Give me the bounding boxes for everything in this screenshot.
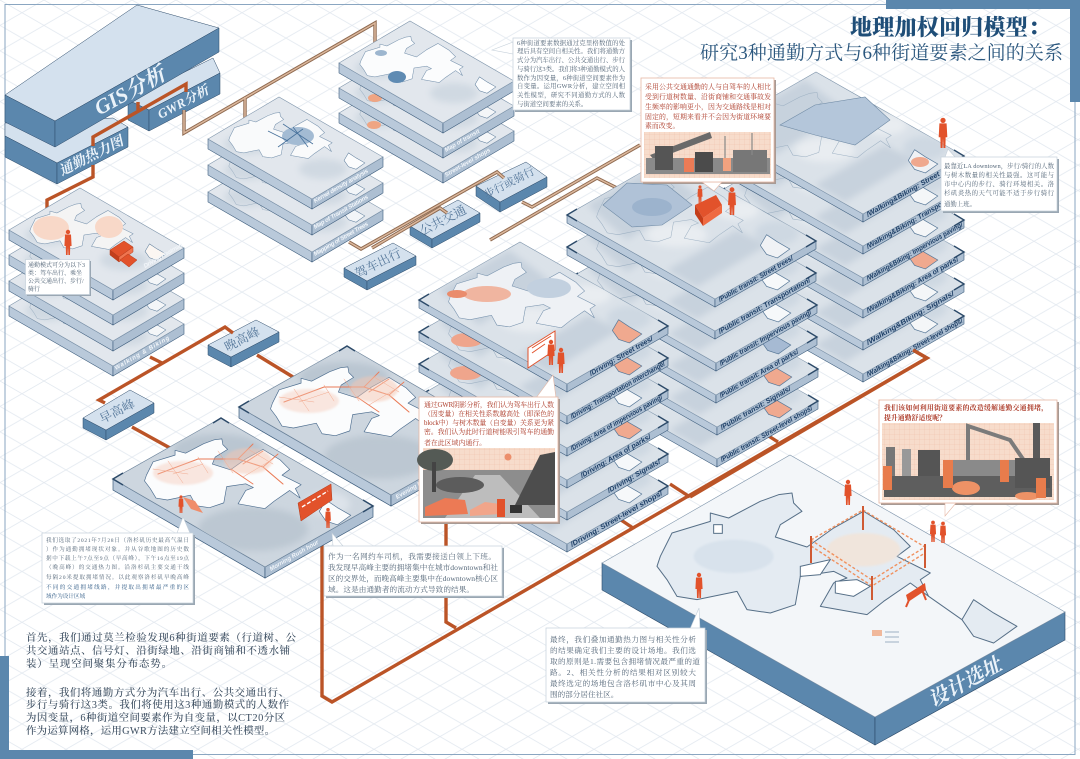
callout: walking note: 杉矶炎热的天气可能不适于步行骑行 [944,188,1055,197]
plate: D2: /Driving: Transportation interchange/ [569,360,667,421]
plate: T3: /Public transit: Impervious paving/ [718,309,814,368]
block: GWR analysis [128,58,220,131]
icon: red bus [298,484,332,528]
block: evening peak [208,320,279,367]
callout: site selection note: 取的原则是1.需要包含拥堵情况最严重的道 [550,656,700,666]
text block: method explanation: 首先，我们通过莫兰检验发现6种街道要素（行道树、公 [26,631,297,644]
text block: method explanation: 共交通站点、信号灯、沿街绿地、沿街商铺和不透水铺 [26,644,290,657]
plate: D3: /Driving: Area of impervious paving/ [569,394,665,453]
plate: T1 [567,157,816,307]
panel: morning rush hour map: Morning Rush hour [269,540,320,573]
plate: D2 [419,274,668,424]
text block: method explanation: 步行与骑行这3类。我们将使用这3种通勤模式的人数作 [26,698,290,711]
callout: driving note: 通过GWR阴影分析，我们认为驾车出行人数 [424,400,554,410]
callout: walking note: 与树木数量的相关性最强。这可能与 [944,170,1054,179]
icon: billboard with presenters [528,331,565,373]
title: 地理加权回归模型： [850,15,1050,40]
callout: driving note: block中）与树木数量（自变量）关系更为紧 [424,418,554,427]
plate: T2 [567,189,816,339]
plate: T1: /Public transit: Street trees/ [717,255,795,304]
text block: method explanation: 接着，我们将通勤方式分为汽车出行、公共交通出行、 [26,686,289,699]
callout: public transit note: 固定的，短期来看并不会因为街道环境要 [645,112,771,122]
plate: W4 [715,168,964,318]
plate: A1: Kernel density analysis [313,168,370,205]
text block: method explanation [26,631,297,737]
plate: A3: Mapping of Street Trees [313,221,370,258]
plate: T5 [569,285,818,435]
plate: T6 [569,317,818,467]
plate: D4 [419,338,668,488]
block: GWR analysis: GWR分析 [155,81,213,122]
callout: public transit note: 素而改变。 [645,121,679,130]
callout: driving note: （因变量）在相关性系数越高处（即深色的 [424,409,554,418]
plate: H4 [9,264,184,376]
map legend [872,630,899,642]
plate: T4 [568,253,817,403]
panel: walking and biking stack [715,72,965,382]
block: evening peak: 晚高峰 [222,324,263,354]
illustration: elevated rail collage [644,132,771,178]
callout: morning and evening data note: 不同的交通拥堵线路，并提取出拥堵最严重的区 [46,583,189,591]
block: public transit [410,200,480,248]
plate: W6 [715,232,965,382]
callout: morning and evening data note: ）作为通勤拥堵现状对象。并从谷歌地图的历史数 [46,545,189,553]
panel: heat map stack [9,188,184,376]
illustration: palm tree street collage [417,448,555,518]
panel: evening rush hour map [239,346,499,506]
block: driving [344,243,416,290]
title [700,15,1063,64]
plate: T2: /Public transit: Transportation/ [717,277,813,336]
block: commuting heat map: 通勤热力图 [56,133,128,179]
plate: A2: Map of Transit Stations [313,194,370,231]
plate: W5: /Walking&Biking: Signals/ [864,290,957,347]
plate: W2: /Walking&Biking: Transportation/ [865,189,965,251]
plate: B2 [339,46,514,158]
plate: W4: /Walking&Biking: Area of parks/ [865,256,961,315]
callout: site selection note [546,608,707,704]
block: commuting heat map [5,118,128,184]
callout: commuting modes: 类：驾车出行、乘坐 [28,269,82,277]
callout: site selection note: 路。2、相关性分析的结果相对区别较大 [550,667,696,677]
plate: H2 [9,213,184,325]
callout: morning and evening data note [42,517,195,605]
callout: public transit note [641,78,776,191]
callout: ride-hailing driver note: 作为一名网约车司机，我需要接送白领上下班。 [328,551,496,562]
callout: GWR method: 6种街道要素数据通过克里格数值的处 [517,38,626,47]
connector pipes: orange [47,84,927,702]
callout: ride-hailing driver note [324,533,504,598]
block: GIS analysis: GIS分析 [90,60,172,120]
callout: GWR method: 与骑行这3类。我们将3种通勤模式的人 [517,64,626,73]
callout: site selection note: 最终，我们叠加通勤热力图与相关性分析 [550,634,696,645]
callout: site selection note: 最终选定的场地包含洛杉矶市中心及其周 [550,678,696,688]
plate: H1 [9,188,184,300]
callout: ride-hailing driver note: 我发现早高峰主要的拥堵集中在城市downtown和社 [328,562,498,572]
subtitle: 研究3种通勤方式与6种街道要素之间的关系 [700,42,1063,64]
callout: GWR method: 自变量。运用GWR分析，建立空间相 [517,81,626,90]
plate: T5: /Public transit: Signals/ [719,385,793,432]
panel: evening rush hour map: Evening Rush hour [395,468,446,501]
plate: W1 [715,72,964,222]
callout: walking note: 市中心内的步行、骑行环境相关。洛 [944,179,1055,188]
block: GIS analysis [5,5,219,147]
connector pipes: tan [184,23,640,249]
panel: street element maps stack B [339,21,514,183]
block: public transit: 公共交通 [417,202,469,238]
plate: D1: /Driving: Street trees/ [588,335,655,378]
callout: driving note: 者在此区域内通行。 [424,438,486,447]
callout: morning and evening data note: 每隔20米提取拥堵情况。以此观察洛杉矶早晚高峰 [46,573,189,581]
panel: driving stack [419,242,668,552]
callout: site selection note: 围的部分居住社区。 [550,689,618,699]
callout: driving note [417,375,560,524]
callout: site selection note: 的结果确定我们主要的设计场地。我们选 [550,645,696,655]
orange pipe: upper run to walking stack [690,350,927,497]
callout: construction question [879,400,1059,516]
callout: commuting modes: 公共交通出行、步行/ [28,277,84,285]
map: city outline [657,493,1017,643]
illustration: construction site collage [882,423,1054,500]
plate: A2 [208,123,383,235]
plate: W6: /Walking&Biking: Street-level shops/ [865,317,965,379]
callout: commuting modes [26,260,91,296]
panel: morning rush hour map [113,418,373,578]
plate: B3 [339,71,514,183]
plate: T4: /Public transit: Area of parks/ [718,348,801,400]
callout: public transit note: 受到行道树数量、沿街商铺和交通事故发 [645,92,771,101]
plate: H1: Driving Heatmap [143,242,184,270]
text block: method explanation: 为因变量，6种街道空间要素作为自变量，以CT20分区 [26,711,285,724]
panel: street element maps stack A [208,97,383,262]
icon: figure with raised arm [939,118,947,148]
plate: A3 [208,150,383,262]
plate: D6 [419,402,668,552]
site selection label: 设计选址 [925,653,1007,712]
plate: D5: /Driving: Signals/ [606,458,663,495]
callout: morning and evening data note: 我们选取了2021年7月28日（洛杉矶历史最高气温日 [46,536,189,544]
plate: D5 [419,370,668,520]
plate: D4: /Driving: Area of parks/ [579,433,653,480]
callout: morning and evening data note: 域作为设计区域 [46,592,86,600]
callout: construction question: 提升通勤舒适度呢？ [884,413,946,422]
block: morning peak [83,390,154,440]
callout: morning and evening data note: （晚高峰）的交通热力图。沿洛杉矶主要交通干线 [46,563,189,571]
plate: W3 [715,136,965,286]
plate: D3 [419,306,668,456]
panel: public transit stack [567,157,818,467]
callout: public transit note: 生频率的影响更小，因为交通路线是相对 [645,102,771,112]
callout: ride-hailing driver note: 区的交界处，而晚高峰主要集中在downtown核心区 [328,573,498,584]
panel: site selection plate [602,455,1065,745]
plate: B3: Street-level shops [444,147,492,179]
text block: method explanation: 装）呈现空间聚集分布态势。 [26,657,172,670]
callout: GWR method [492,38,632,112]
callout: GWR method: 理后具有空间自相关性。我们将通勤方 [517,46,626,55]
panel: analysis blocks [5,5,547,440]
text block: method explanation: 作为运算网格，运用GWR方法建立空间相关性模型。 [26,724,275,737]
fence around chosen site [811,506,925,600]
icon: commuter figure [64,230,72,255]
plate: T3 [568,221,817,371]
callout: GWR method: 与街道空间要素的关系。 [517,99,587,108]
plate: W5 [715,200,964,350]
block: driving: 驾车出行 [352,245,404,281]
icon: transit kiosk and figure [695,185,736,226]
plate: D1 [419,242,668,392]
callout: GWR method: 关性模型，研究不同通勤方式的人数 [517,90,626,99]
icon: red cars [110,241,137,267]
callout: morning and evening data note: 据中下载上午7点至9点（早高峰），下午16点至19点 [46,554,189,562]
plate: H3 [9,239,184,351]
plate: T6: /Public transit: Street-level shops/ [719,405,815,464]
plate: B1 [339,21,514,133]
callout: commuting modes: 通勤模式可分为以下3 [28,261,85,269]
callout: public transit note: 采用公共交通通勤的人与自驾车的人相比 [645,82,771,91]
plate: W2 [715,104,965,254]
icon: roadblock barrier [906,583,926,607]
block: morning peak: 早高峰 [97,396,138,426]
block: walking or cycling [476,162,547,212]
plate: W1: /Walking&Biking: Street trees/ [865,160,961,219]
plate: A1 [208,97,383,209]
plate: W3: /Walking&Biking: Impervious paving/ [865,221,965,283]
callout: walking note: 通勤上班。 [944,199,976,208]
icon: orange billboard [178,495,203,513]
callout: GWR method: 数作为因变量，6种街道空间要素作为 [517,73,626,82]
callout: ride-hailing driver note: 域。这是由通勤者的流动方式导致的结果。 [328,584,474,594]
callout: walking note: 最靠近LA downtown，步行/骑行的人数 [944,161,1055,170]
plate: B2: Map of transit [444,128,482,154]
icon: standing figures [695,480,946,598]
callout: commuting modes: 骑行 [28,285,40,293]
callout: walking note [941,149,1059,213]
callout: driving note: 密。我们认为此时行道树能吸引驾车的通勤 [424,427,554,436]
callout: construction question: 我们该如何利用街道要素的改造缓解通勤交通拥堵， [884,403,1048,413]
plate: D6: /Driving: Street-level shops/ [569,490,665,549]
block: walking or cycling: 步行或骑行 [482,164,537,201]
plate: H4: Walking & Biking [114,335,171,372]
callout: GWR method: 式分为汽车出行、公共交通出行、步行 [517,55,626,64]
